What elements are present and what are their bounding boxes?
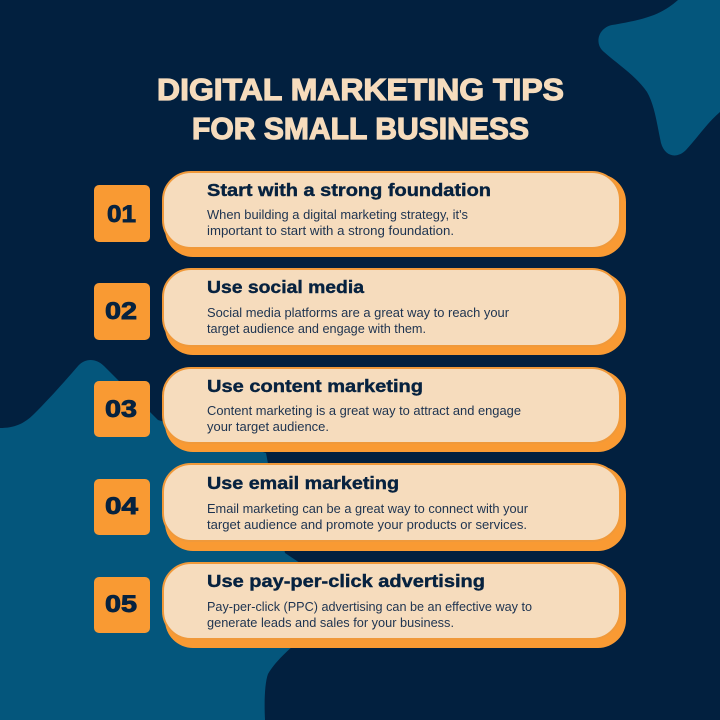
- body 02: target audience and engage with them.: [207, 322, 426, 336]
- number badge 04: [94, 479, 150, 535]
- title: [157, 72, 564, 146]
- card 03: [163, 368, 620, 443]
- tip 04: [94, 464, 626, 551]
- number badge 05: 05: [105, 591, 137, 618]
- tip 05: [94, 563, 626, 648]
- body 05: [207, 600, 532, 630]
- body 02: Social media platforms are a great way to reach your: [207, 306, 509, 320]
- body 01: [207, 208, 468, 238]
- card 04: [163, 464, 620, 541]
- body 05: generate leads and sales for your business.: [207, 616, 454, 630]
- number badge 04: 04: [105, 493, 139, 520]
- number badge 01: [94, 185, 150, 242]
- heading 05: Use pay-per-click advertising: [207, 571, 485, 591]
- background shape: top right blob: [598, 0, 720, 155]
- tip 01: [94, 172, 626, 257]
- body 05: Pay-per-click (PPC) advertising can be an effective way to: [207, 600, 532, 614]
- background shape: bottom left blob: [0, 360, 300, 720]
- heading 01: Start with a strong foundation: [207, 180, 491, 200]
- title: FOR SMALL BUSINESS: [192, 111, 529, 146]
- card shadow 05: [165, 565, 626, 648]
- body 04: [207, 502, 528, 532]
- card 02: [163, 269, 620, 346]
- heading 04: Use email marketing: [207, 473, 399, 493]
- body 04: target audience and promote your products or services.: [207, 518, 527, 532]
- card 01: [163, 172, 620, 248]
- card shadow 04: [165, 466, 626, 551]
- number badge 03: 03: [105, 396, 137, 423]
- body 03: Content marketing is a great way to attract and engage: [207, 404, 521, 418]
- card shadow 03: [165, 370, 626, 452]
- number badge 03: [94, 381, 150, 437]
- body 01: important to start with a strong foundation.: [207, 224, 454, 238]
- body 04: Email marketing can be a great way to connect with your: [207, 502, 528, 516]
- tip 02: [94, 269, 626, 355]
- number badge 05: [94, 577, 150, 633]
- card 05: [163, 563, 620, 639]
- title: DIGITAL MARKETING TIPS: [157, 72, 564, 107]
- body 02: [207, 306, 509, 336]
- number badge 01: 01: [107, 201, 136, 228]
- card shadow 02: [165, 272, 626, 355]
- number badge 02: 02: [105, 298, 137, 325]
- body 03: [207, 404, 521, 434]
- body 01: When building a digital marketing strategy, it's: [207, 208, 468, 222]
- heading 03: Use content marketing: [207, 376, 423, 396]
- card shadow 01: [165, 174, 626, 257]
- tip 03: [94, 368, 626, 452]
- heading 02: Use social media: [207, 277, 364, 297]
- number badge 02: [94, 283, 150, 340]
- body 03: your target audience.: [207, 420, 329, 434]
